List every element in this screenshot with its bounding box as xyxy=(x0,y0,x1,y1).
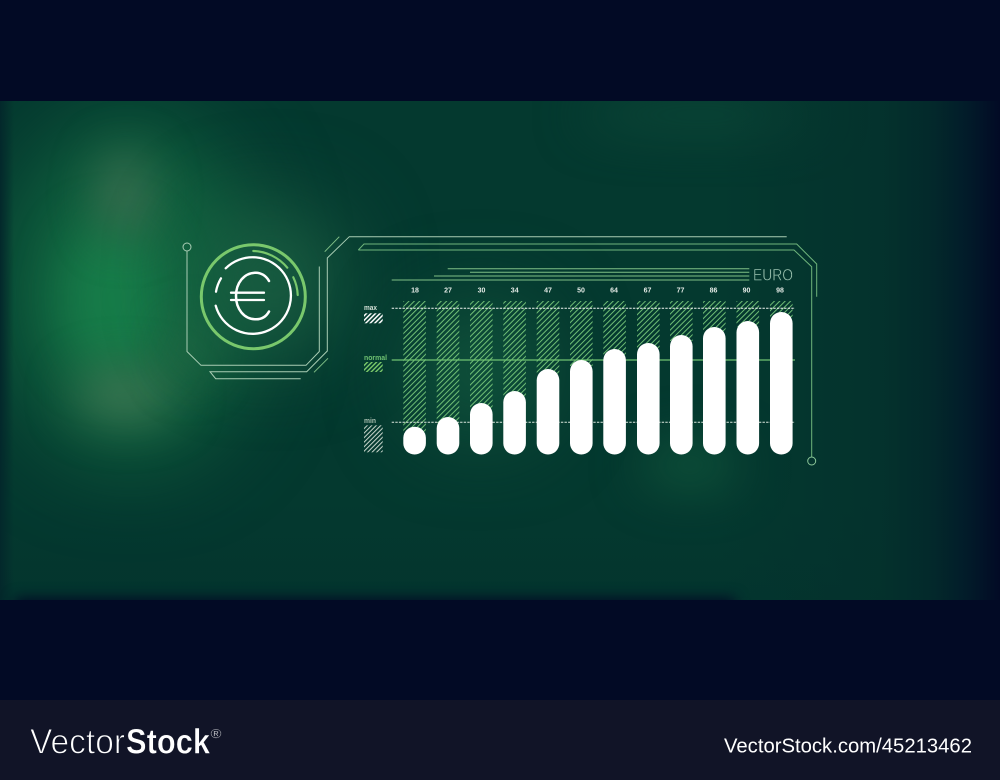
value labels: 34 xyxy=(511,288,519,295)
bar chart xyxy=(392,288,795,454)
value labels: 27 xyxy=(444,288,452,295)
value labels: 18 xyxy=(411,288,419,295)
legend: max: max xyxy=(364,305,377,312)
icon: euro coin xyxy=(201,245,305,349)
value labels: 98 xyxy=(776,288,784,295)
small accent strokes xyxy=(314,237,339,372)
legend: max xyxy=(364,305,383,323)
value labels: 64 xyxy=(610,288,618,295)
header speed lines xyxy=(392,269,749,280)
value labels xyxy=(411,288,784,295)
footer bar xyxy=(0,700,1000,780)
logo: VectorStock: Vector xyxy=(30,722,125,762)
value labels: 77 xyxy=(677,288,684,295)
legend xyxy=(364,305,387,452)
value labels: 47 xyxy=(544,288,552,295)
legend: min: min xyxy=(364,418,376,425)
left frame around euro icon xyxy=(183,243,319,365)
bottom right node xyxy=(808,457,816,465)
logo: VectorStock: ® xyxy=(210,726,222,741)
legend: normal: normal xyxy=(364,355,387,362)
white bars xyxy=(403,312,793,454)
currency label: EURO xyxy=(753,266,793,284)
right frame lines xyxy=(358,244,817,457)
hatched range columns xyxy=(403,301,793,433)
value labels: 50 xyxy=(577,288,585,295)
logo: VectorStock: Stock xyxy=(126,722,210,762)
reference lines xyxy=(392,308,795,422)
outer frame line xyxy=(210,237,787,379)
green gradient panel xyxy=(0,97,1000,616)
legend: normal xyxy=(364,355,387,372)
chart frame: circuit lines xyxy=(183,237,817,465)
logo: VectorStock xyxy=(30,722,222,762)
value labels: 86 xyxy=(710,288,717,295)
value labels: 67 xyxy=(644,288,651,295)
value labels: 30 xyxy=(478,288,485,295)
image id text: VectorStock.com/45213462 xyxy=(724,736,972,758)
legend: min xyxy=(364,418,383,452)
value labels: 90 xyxy=(743,288,750,295)
